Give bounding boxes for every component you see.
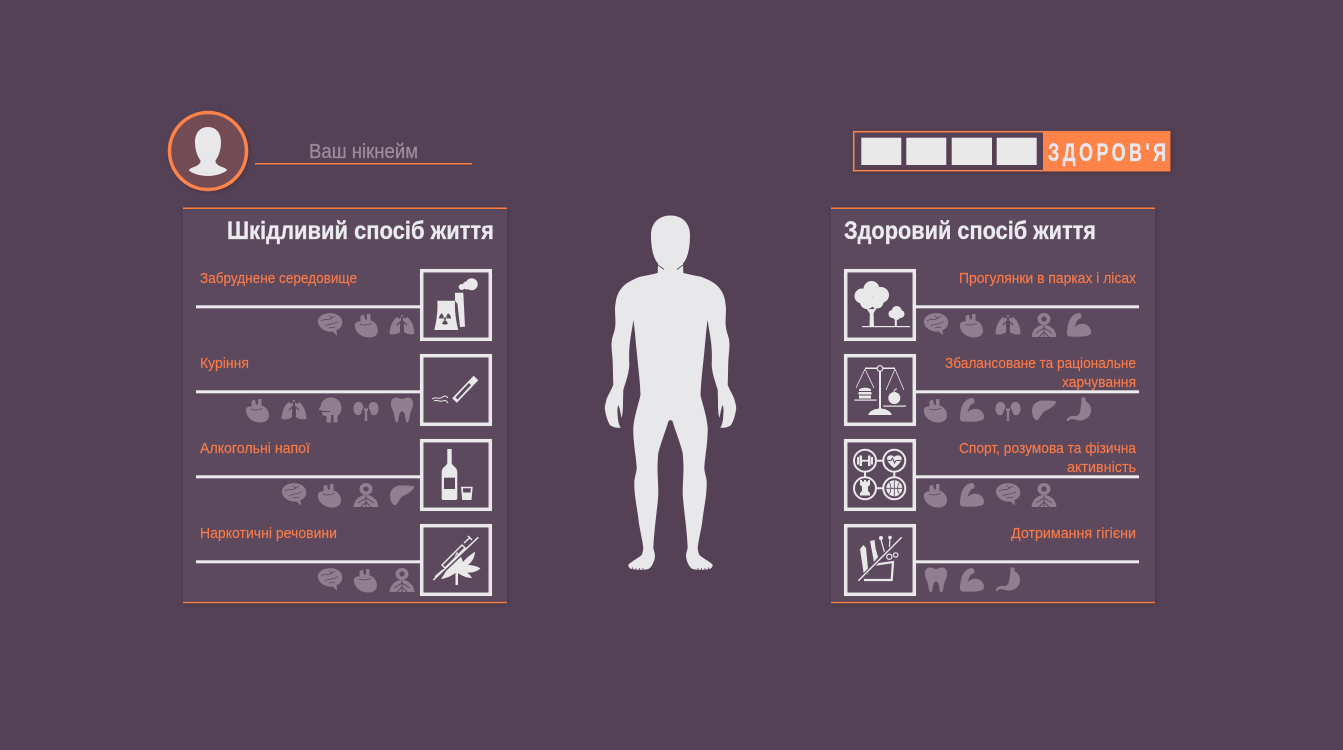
- row: alcoholic drinks: Алкогольні напої: [200, 440, 311, 457]
- row: polluted environment: Забруднене середовище: [200, 270, 357, 287]
- row: polluted environment: [196, 270, 490, 339]
- avatar: [170, 112, 246, 190]
- heading: harmful lifestyle: Шкідливий спосіб життя: [227, 217, 494, 245]
- row: narcotics: [196, 525, 490, 594]
- row: smoking: [196, 355, 490, 424]
- heading: healthy lifestyle: Здоровий спосіб життя: [844, 217, 1096, 245]
- row: balanced nutrition: [846, 355, 1139, 424]
- row: sport, mental and physical activity: активність: [1067, 459, 1136, 476]
- row: balanced nutrition: Збалансоване та раціональне: [945, 355, 1136, 372]
- row: walks in parks and forests: [846, 270, 1139, 339]
- health bar: ЗДОРОВ'Я: [1048, 138, 1166, 167]
- row: balanced nutrition: харчування: [1062, 374, 1136, 391]
- row: narcotics: Наркотичні речовини: [200, 525, 337, 542]
- human body silhouette: [605, 216, 736, 570]
- row: sport, mental and physical activity: [846, 440, 1139, 509]
- panel: harmful lifestyle: [183, 208, 507, 603]
- row: smoking: Куріння: [200, 355, 249, 372]
- nickname field: Ваш нікнейм: [309, 141, 418, 163]
- row: walks in parks and forests: Прогулянки в парках і лісах: [959, 270, 1136, 287]
- row: sport, mental and physical activity: Спорт, розумова та фізична: [959, 440, 1137, 457]
- row: hygiene: Дотримання гігієни: [1011, 525, 1136, 542]
- health bar: [854, 131, 1170, 171]
- panel: healthy lifestyle: [831, 208, 1155, 603]
- row: alcoholic drinks: [196, 440, 490, 509]
- row: hygiene: [846, 525, 1139, 594]
